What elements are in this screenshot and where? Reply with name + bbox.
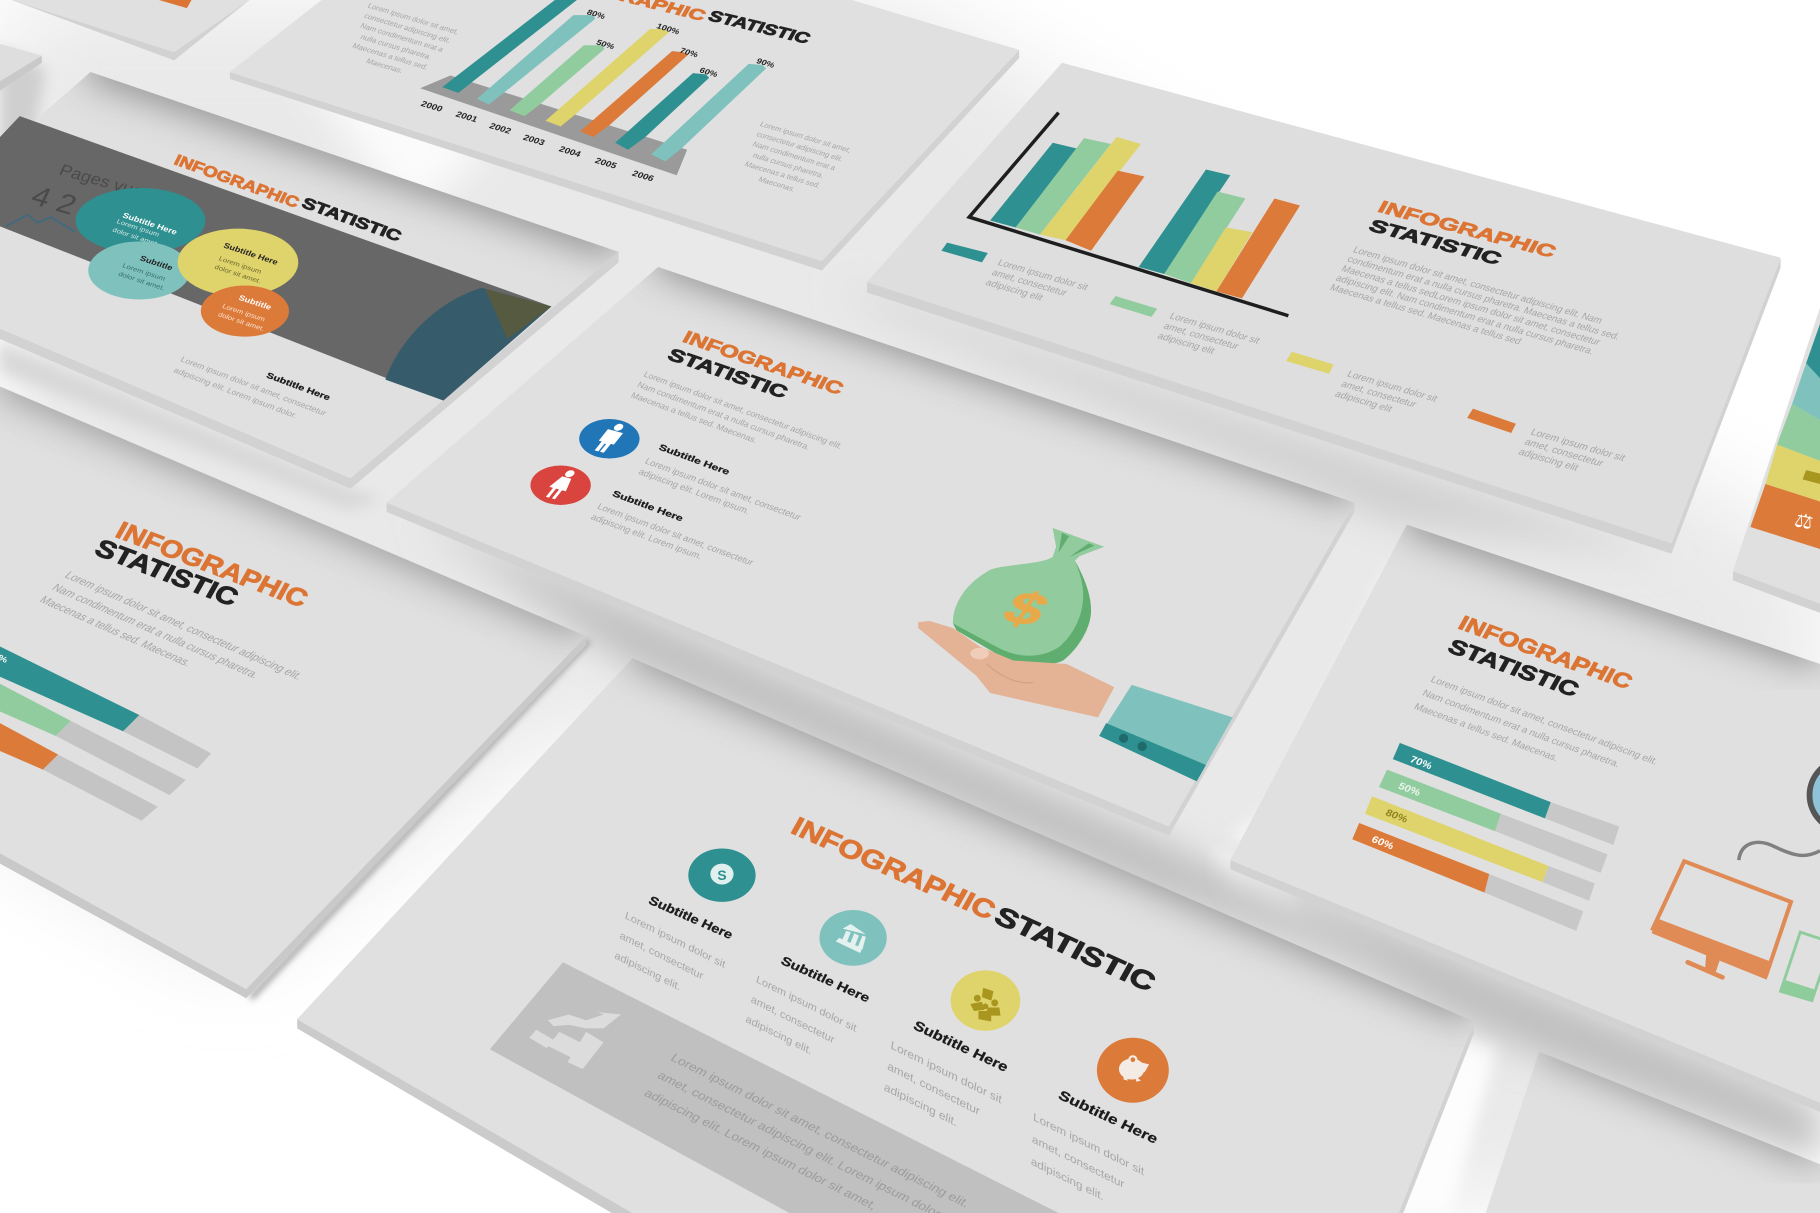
legend swatches	[941, 243, 1516, 433]
text 4: Lorem ipsum dolor sit	[1033, 1110, 1145, 1179]
bubble: teal	[75, 188, 205, 253]
left text: Maecenas.	[364, 57, 405, 75]
text 4: adipiscing elit.	[1031, 1154, 1104, 1203]
top shadow	[633, 641, 1474, 1004]
right text: consectetur adipiscing elit.	[755, 130, 845, 163]
text 3: amet, consectetur	[887, 1059, 981, 1118]
heading	[171, 151, 404, 245]
subtitle 1: Subtitle Here	[646, 893, 735, 942]
chart floor	[420, 75, 687, 175]
axis year labels: 2004	[557, 144, 584, 159]
heading: STATISTIC	[90, 534, 243, 611]
top shadow	[1539, 1035, 1820, 1149]
paragraph: Maecenas a tellus sed. Maecenas.	[629, 390, 759, 445]
icon: female	[530, 465, 591, 505]
bar labels	[1369, 754, 1435, 852]
bubble: teal: Subtitle Here	[121, 211, 179, 237]
bubble: light teal: Subtitle	[138, 253, 175, 272]
bubble: light teal: dolor sit amet.	[117, 270, 166, 292]
percent labels: 80%	[585, 7, 608, 21]
gray banner	[490, 962, 1059, 1213]
heading: INFOGRAPHIC	[679, 328, 847, 399]
panel: right edge stacked slide	[1733, 308, 1820, 613]
heading: STATISTIC	[664, 345, 791, 403]
bubble: orange: Lorem ipsum	[221, 303, 266, 323]
photo band	[0, 116, 551, 400]
banner text: adipiscing elit. Lorem ipsum dolor sit amet,	[642, 1086, 880, 1212]
heading: STATISTIC	[1365, 217, 1505, 269]
bar group 2	[1139, 169, 1300, 298]
subtitle: male: Subtitle Here	[657, 443, 732, 478]
bubble: orange	[201, 286, 289, 337]
caption: adipiscing elit. Lorem ipsum dolor.	[172, 365, 299, 420]
icon: cable	[1739, 842, 1820, 860]
text 4: amet, consectetur	[1032, 1132, 1125, 1191]
bar labels: 70%	[1408, 754, 1435, 772]
icon: magnifier	[1810, 759, 1820, 831]
heading: INFOGRAPHIC	[1454, 611, 1637, 694]
text: male: Lorem ipsum dolor sit amet, consectetur	[643, 456, 803, 522]
bubble: yellow: dolor sit amet.	[213, 263, 262, 285]
legend text: amet, consectetur	[1339, 379, 1419, 410]
axis year labels: 2001	[454, 110, 479, 124]
left text: Nam condimentum erat a	[359, 21, 446, 54]
heading: INFOGRAPHIC	[1374, 198, 1559, 262]
text: female: Lorem ipsum dolor sit amet, consectetur	[596, 502, 755, 567]
stacked bands	[1750, 324, 1820, 549]
bar labels: 60%	[1369, 834, 1396, 852]
panel: left slide fragment	[0, 44, 42, 91]
percent labels: 50%	[595, 38, 617, 51]
heading: STATISTIC	[1444, 634, 1584, 701]
heading: INFOGRAPHIC	[111, 516, 313, 613]
bubble: yellow: Lorem ipsum	[217, 255, 263, 276]
banner text: Lorem ipsum dolor sit amet, consectetur adipiscing elit.	[668, 1051, 973, 1210]
paragraph: Maecenas a tellus sed. Maecenas.	[1412, 702, 1560, 764]
progress bars	[1352, 743, 1619, 931]
bubble: yellow: Subtitle Here	[222, 241, 280, 267]
panel: bottom-right blank slide	[1486, 1035, 1820, 1213]
paragraph: adipiscing elit. Nam condimentum erat a nulla cursus pharetra.	[1333, 273, 1596, 357]
panel: 3D bar chart slide	[230, 0, 1019, 270]
panel: grouped bar chart slide	[867, 63, 1781, 554]
bubble: light teal	[88, 241, 190, 299]
right text: Maecenas.	[757, 175, 797, 193]
top shadow	[91, 58, 619, 238]
axis year labels: 2006	[631, 169, 656, 183]
panel: four icons slide	[297, 641, 1474, 1213]
legend text: Lorem ipsum dolor sit	[995, 258, 1090, 293]
panel: top-left slide fragment	[12, 0, 250, 60]
left text: consectetur adipiscing elit.	[362, 11, 453, 45]
right text: nulla cursus pharetra.	[751, 151, 826, 180]
icon: orange piggy bank	[1097, 1038, 1169, 1103]
legend text: adipiscing elit	[983, 278, 1045, 303]
paragraph: Lorem ipsum dolor sit amet, consectetur adipiscing elit.	[1428, 675, 1660, 767]
axis year labels: 2000	[419, 99, 444, 113]
text 1: amet, consectetur	[619, 930, 705, 982]
illustration: money bag on hand	[918, 528, 1233, 781]
text: male: adipiscing elit. Lorem ipsum.	[637, 467, 752, 516]
panel: horizontal bars slide	[0, 371, 586, 998]
legend text: amet, consectetur	[1522, 437, 1606, 469]
text 3: adipiscing elit.	[883, 1080, 958, 1129]
legend text: adipiscing elit	[1155, 331, 1217, 357]
axis year labels: 2003	[521, 133, 547, 147]
text 1: Lorem ipsum dolor sit	[624, 910, 726, 971]
percent labels	[585, 7, 777, 79]
paragraph: condimentum erat a nulla cursus pharetra. Maecenas a tellus sed.	[1345, 254, 1622, 343]
3D bars	[442, 0, 766, 161]
panel: photo and bubbles slide	[0, 58, 619, 489]
legend text: Lorem ipsum dolor sit	[1345, 369, 1440, 404]
right text: Nam condimentum erat a	[751, 140, 838, 172]
text 3: Lorem ipsum dolor sit	[890, 1038, 1003, 1107]
legend text: amet, consectetur	[1161, 321, 1241, 352]
right text: Lorem ipsum dolor sit amet,	[758, 120, 853, 155]
icon: monitor	[1652, 861, 1791, 980]
text 2: amet, consectetur	[750, 994, 836, 1046]
paragraph: Nam condimentum erat a nulla cursus pharetra.	[636, 380, 812, 452]
top shadow	[658, 250, 1355, 485]
percent labels: 60%	[698, 65, 720, 79]
text 1: adipiscing elit.	[613, 950, 682, 993]
axis year labels	[419, 99, 656, 183]
bubble: light teal: Lorem ipsum	[121, 262, 167, 283]
text: female: adipiscing elit. Lorem ipsum.	[589, 512, 704, 561]
heading: STATISTIC	[299, 194, 404, 245]
photo band: Pages vues	[56, 160, 155, 203]
bubble: teal: Lorem ipsum	[115, 218, 161, 238]
legend text: Lorem ipsum dolor sit	[1528, 427, 1627, 464]
left text: Maecenas a tellus sed.	[351, 41, 430, 71]
heading: STATISTIC	[705, 7, 814, 47]
left text: nulla cursus pharetra.	[359, 33, 434, 61]
heading	[664, 328, 847, 403]
paragraph: Maecenas a tellus sed. Maecenas a tellus sed	[1328, 283, 1523, 347]
subtitle 4: Subtitle Here	[1056, 1088, 1160, 1147]
top shadow	[1407, 508, 1820, 648]
axis year labels: 2002	[488, 121, 513, 136]
subtitle 3: Subtitle Here	[911, 1019, 1010, 1075]
paragraph: Lorem ipsum dolor sit amet, consectetur adipiscing elit. Nam	[1351, 245, 1604, 326]
panel: money bag slide	[387, 250, 1355, 836]
bar labels: 50%	[1396, 781, 1423, 799]
heading	[547, 0, 814, 47]
icon: growth chart	[529, 1012, 621, 1069]
paragraph: Nam condimentum erat a nulla cursus pharetra.	[49, 582, 261, 681]
top shadow	[0, 371, 586, 621]
text 2: adipiscing elit.	[744, 1014, 813, 1057]
right text: Maecenas a tellus sed.	[743, 160, 822, 190]
photo band: 4 2	[26, 181, 81, 221]
orange bar fragment	[159, 0, 192, 8]
heading	[786, 812, 1161, 998]
heading	[1365, 198, 1559, 269]
heading: INFOGRAPHIC	[171, 151, 302, 211]
legend text: adipiscing elit	[1516, 447, 1580, 474]
icon: male	[579, 419, 640, 459]
legend text: Lorem ipsum dolor sit	[1167, 311, 1262, 346]
subtitle: Subtitle Here	[265, 371, 332, 402]
percent labels: 100%	[655, 21, 682, 36]
icon: teal dollar	[688, 849, 756, 902]
icon: scale: ⚖	[1792, 509, 1816, 534]
progress bars	[0, 647, 211, 821]
subtitle: female: Subtitle Here	[610, 489, 685, 524]
legend text: amet, consectetur	[989, 268, 1070, 299]
panel: progress and devices slide	[1230, 508, 1820, 1112]
icon: phone	[1781, 932, 1820, 1001]
paragraph: Maecenas a tellus sedLorem ipsum dolor sit amet, consectetur	[1339, 264, 1603, 348]
heading: STATISTIC	[989, 901, 1161, 998]
icon: yellow people	[951, 970, 1020, 1031]
bar group 1	[990, 137, 1144, 251]
paragraph: Lorem ipsum dolor sit amet, consectetur adipiscing elit.	[62, 570, 305, 682]
paragraph: Maecenas a tellus sed. Maecenas.	[36, 595, 194, 669]
bar labels: 80%	[1383, 807, 1410, 825]
icon: teal dollar: S	[717, 867, 727, 883]
icon: cash	[1803, 470, 1820, 484]
bubble: orange: Subtitle	[237, 293, 273, 312]
legend text	[983, 258, 1627, 484]
left text: Lorem ipsum dolor sit amet,	[366, 1, 461, 36]
paragraph: Lorem ipsum dolor sit amet, consectetur adipiscing elit.	[642, 369, 845, 451]
percent labels: 90%	[755, 56, 777, 70]
caption: Lorem ipsum dolor sit amet, consectetur	[179, 354, 329, 418]
axis year labels: 2005	[593, 156, 619, 170]
percent labels: 70%	[678, 46, 700, 59]
icon: light teal bank	[819, 910, 887, 966]
bubble: orange: dolor sit amet.	[217, 311, 266, 333]
illustration: money bag on hand: $	[993, 582, 1058, 636]
subtitle 2: Subtitle Here	[779, 954, 872, 1005]
text 2: Lorem ipsum dolor sit	[755, 974, 858, 1035]
chart axes	[969, 113, 1288, 316]
bubble: yellow	[178, 229, 298, 296]
legend text: adipiscing elit	[1333, 389, 1394, 415]
paragraph: Nam condimentum erat a nulla cursus pharetra.	[1420, 688, 1622, 770]
bubble: teal: dolor sit amet.	[111, 226, 160, 248]
heading: INFOGRAPHIC	[786, 812, 1000, 926]
